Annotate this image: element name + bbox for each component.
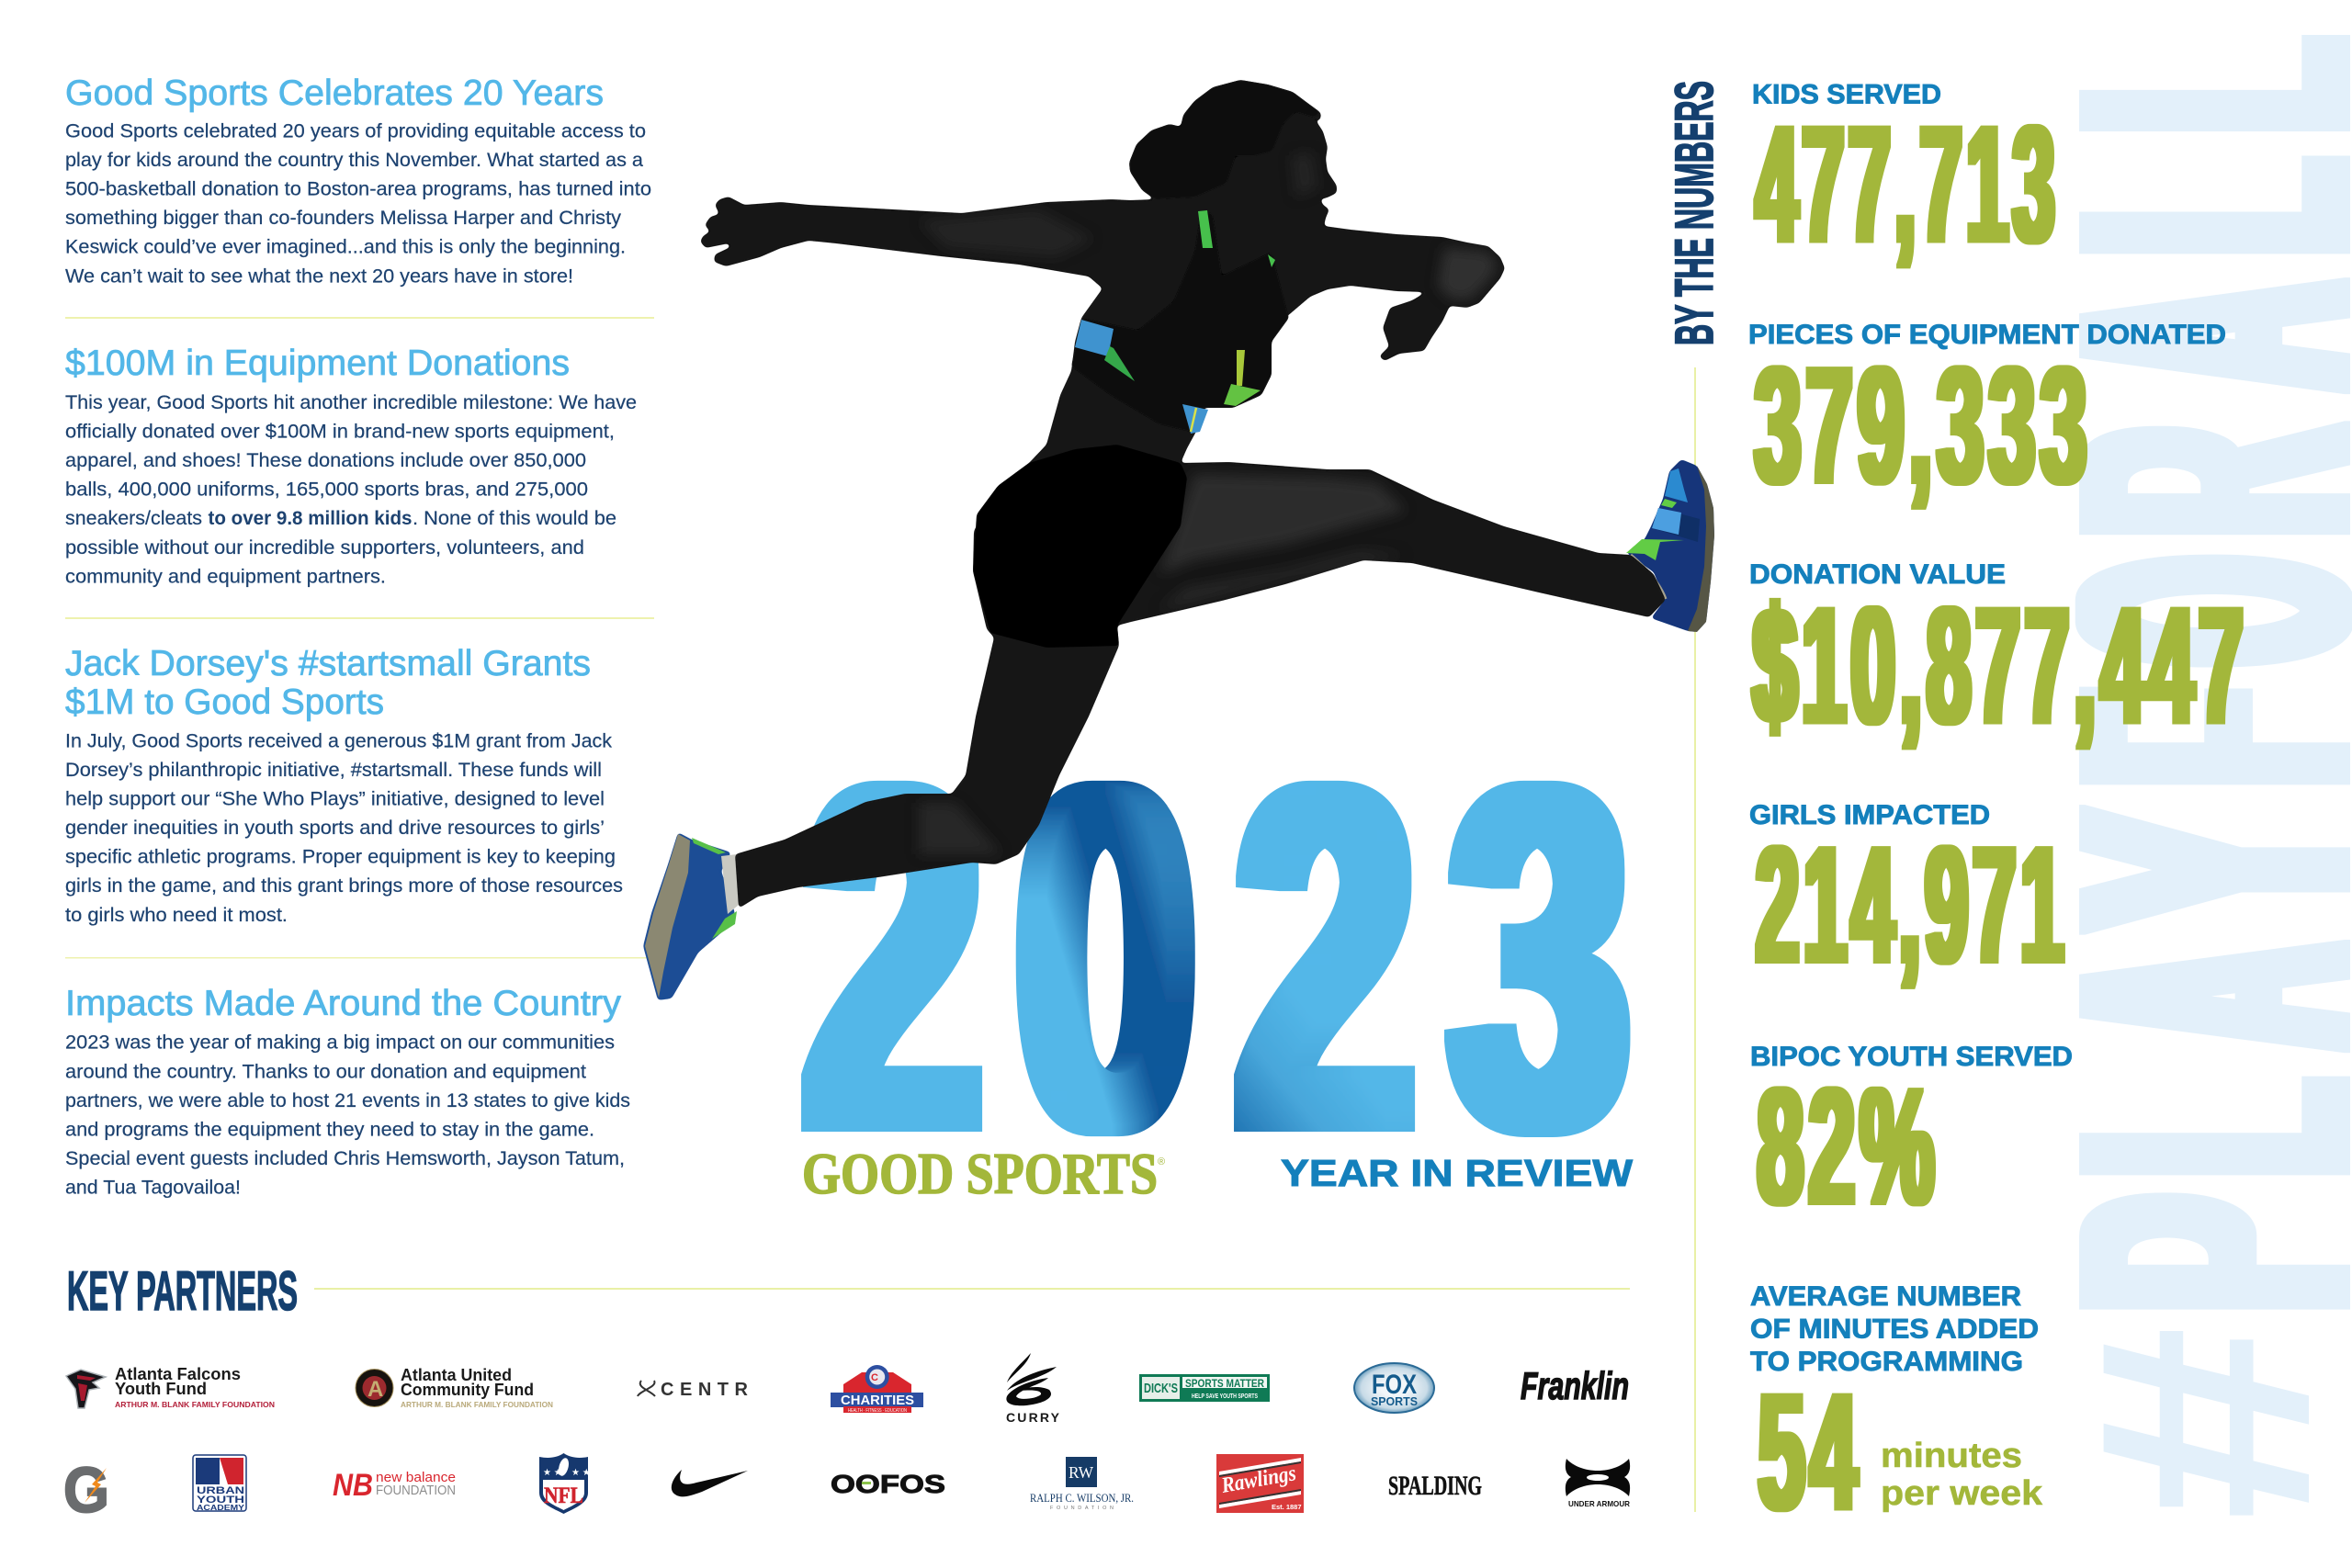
logo: New Balance Foundation: new balance [376, 1470, 456, 1485]
logo: Dick's Sports Matter: SPORTS MATTER [1185, 1377, 1264, 1390]
article: Jack Dorsey's #startsmall Grants [65, 644, 623, 926]
big year: 2023: 2 [804, 686, 981, 1230]
text block: play for kids around the country this November. What started as a [65, 150, 643, 171]
logo: Cubs Charities: C [871, 1372, 878, 1383]
logo: New Balance Foundation: NB [333, 1468, 373, 1503]
logo: Spalding: SPALDING [1388, 1471, 1482, 1501]
logo: New Balance Foundation: FOUNDATION [376, 1483, 456, 1498]
stat: average minutes added: TO PROGRAMMING [1750, 1347, 2023, 1377]
logo: Dick's Sports Matter: DICK'S [1144, 1381, 1178, 1396]
big year: 2023: 3 [1451, 686, 1628, 1230]
logo: New Balance Foundation [333, 1468, 456, 1503]
panel: statistics [1748, 79, 2247, 1545]
logo: Rawlings: Est. 1887 [1272, 1503, 1302, 1511]
logo: Atlanta Falcons Youth Fund: Youth Fund [115, 1380, 207, 1398]
logo: Cubs Charities [831, 1365, 923, 1414]
logo: Fox Sports [1354, 1363, 1434, 1413]
text block: This year, Good Sports hit another incredible milestone: We have [65, 392, 637, 413]
text block: specific athletic programs. Proper equipment is key to keeping [65, 847, 616, 868]
text block: help support our “She Who Plays” initiative, designed to level [65, 788, 605, 810]
logo: Dick's Sports Matter: HELP SAVE YOUTH SPORTS [1192, 1393, 1258, 1400]
text block [65, 392, 637, 587]
panel: key partners [63, 1260, 1630, 1526]
panel: news articles [65, 73, 654, 1198]
text block: Special event guests included Chris Hemsworth, Jayson Tatum, [65, 1148, 625, 1169]
sports bra [1071, 211, 1289, 433]
logo: Ralph C. Wilson Jr. Foundation: RW [1069, 1463, 1093, 1482]
heading [65, 644, 591, 722]
stat: average minutes added: AVERAGE NUMBER [1750, 1281, 2021, 1312]
logo: Under Armour: UNDER ARMOUR [1568, 1499, 1630, 1508]
logo: Centr: CENTR [661, 1380, 749, 1400]
stat: average minutes added: per week [1881, 1474, 2043, 1513]
text block: 500-basketball donation to Boston-area programs, has turned into [65, 179, 651, 200]
body [700, 80, 1666, 908]
text block: and Tua Tagovailoa! [65, 1178, 241, 1198]
left shoe [643, 832, 739, 1000]
logo: Atlanta United Community Fund: Atlanta United [401, 1366, 512, 1384]
stat: average minutes added: minutes [1881, 1437, 2022, 1475]
text block: something bigger than co-founders Melissa Harper and Christy [65, 208, 622, 229]
article: Good Sports Celebrates 20 Years [65, 73, 651, 287]
logo: NFL [539, 1453, 591, 1514]
heading: Good Sports Celebrates 20 Years [65, 73, 604, 113]
text block: Good Sports celebrated 20 years of providing equitable access to [65, 121, 646, 141]
logo: Dick's Sports Matter [1139, 1374, 1270, 1402]
logo: Curry [1006, 1353, 1060, 1425]
text block: 2023 was the year of making a big impact on our communities [65, 1032, 615, 1054]
article: $100M in Equipment Donations [65, 344, 637, 587]
text block: balls, 400,000 uniforms, 165,000 sports bras, and 275,000 [65, 479, 588, 501]
text block: possible without our incredible supporters, volunteers, and [65, 537, 584, 558]
text block: girls in the game, and this grant brings more of those resources [65, 875, 623, 897]
text block: Dorsey’s philanthropic initiative, #startsmall. These funds will [65, 760, 602, 781]
logo: NFL: ★ ★ [571, 1468, 591, 1478]
text block: . None of this would be [413, 508, 616, 529]
logo: MLB Urban Youth Academy: YOUTH [197, 1495, 244, 1506]
logo: MLB Urban Youth Academy: ACADEMY [197, 1504, 245, 1512]
heading: $1M to Good Sports [65, 682, 384, 722]
logo: Under Armour [1566, 1459, 1630, 1508]
text block: community and equipment partners. [65, 566, 386, 587]
logo: MLB Urban Youth Academy: URBAN [197, 1485, 244, 1496]
logo: Gatorade: G [63, 1454, 109, 1526]
logo: Fox Sports: SPORTS [1371, 1394, 1418, 1408]
text block: We can’t wait to see what the next 20 years have in store! [65, 265, 573, 287]
text block [65, 1032, 630, 1198]
bra accents [1075, 210, 1275, 434]
logo: Franklin: Franklin [1521, 1364, 1629, 1407]
logo: Oofos: OOFOS [831, 1470, 945, 1498]
stat: kids served [1752, 79, 2059, 277]
stat: kids served: KIDS SERVED [1752, 79, 1941, 110]
logo: Fox Sports: FOX [1372, 1370, 1417, 1400]
stat: pieces of equipment donated: PIECES OF EQUIPMENT DONATED [1748, 320, 2226, 350]
heading: $100M in Equipment Donations [65, 344, 570, 383]
big year: 2023: 0 [1017, 686, 1194, 1230]
big year: 2023 [804, 686, 1628, 1230]
logo: Atlanta United Community Fund: A [368, 1377, 383, 1402]
stat: donation value: DONATION VALUE [1749, 559, 2006, 590]
stat: BIPOC youth served: BIPOC YOUTH SERVED [1750, 1042, 2073, 1072]
stat: girls impacted: GIRLS IMPACTED [1749, 800, 1990, 830]
logo wordmark: Good Sports: GOOD SPORTS [802, 1142, 1158, 1206]
logo: Atlanta United Community Fund: Community Fund [401, 1381, 534, 1399]
heading: Jack Dorsey's #startsmall Grants [65, 644, 591, 683]
heading: Impacts Made Around the Country [65, 984, 622, 1023]
logo: Curry: CURRY [1006, 1410, 1060, 1425]
logo: Atlanta United Community Fund [356, 1366, 553, 1409]
logo: Atlanta Falcons Youth Fund: Atlanta Falcons [115, 1365, 241, 1383]
stat: BIPOC youth served: 82% [1757, 1055, 1939, 1239]
text block: to girls who need it most. [65, 905, 288, 926]
logo: Atlanta Falcons Youth Fund: ARTHUR M. BLANK FAMILY FOUNDATION [115, 1400, 275, 1409]
logo: NFL: ★ ★ [543, 1468, 562, 1478]
big year: 2023: 2 [1237, 686, 1414, 1230]
hair [1129, 80, 1321, 199]
heading: key partners: KEY PARTNERS [67, 1260, 298, 1322]
text block [65, 730, 623, 926]
logo: Ralph C. Wilson Jr. Foundation [1030, 1457, 1134, 1511]
text block: officially donated over $100M in brand-new sports equipment, [65, 422, 615, 443]
logo: Ralph C. Wilson Jr. Foundation: FOUNDATION [1050, 1506, 1114, 1511]
stat: average minutes added: OF MINUTES ADDED [1750, 1314, 2039, 1345]
logo: Nike swoosh [672, 1470, 748, 1496]
text block: and programs the equipment they need to stay in the game. [65, 1119, 594, 1140]
background hashtag: #PLAYFORALL [1999, 40, 2352, 1520]
logo: Atlanta Falcons Youth Fund [66, 1365, 275, 1409]
stat: girls impacted [1749, 800, 2068, 998]
logo: MLB Urban Youth Academy [193, 1455, 246, 1512]
logo: Rawlings [1216, 1454, 1304, 1513]
logo: Cubs Charities: CHARITIES [841, 1393, 914, 1408]
text block: In July, Good Sports received a generous $1M grant from Jack [65, 730, 612, 751]
text block: gender inequities in youth sports and drive resources to girls’ [65, 818, 605, 839]
stat: average minutes added: 54 [1758, 1359, 1861, 1545]
logo: Rawlings: Rawlings [1219, 1461, 1298, 1498]
text block: to over 9.8 million kids [208, 508, 412, 529]
skin highlights [919, 152, 1498, 854]
logo wordmark: Good Sports: ® [1158, 1156, 1165, 1168]
text block: sneakers/cleats [65, 508, 202, 529]
text block: Keswick could’ve ever imagined...and this is only the beginning. [65, 237, 626, 258]
logo: Atlanta United Community Fund: ARTHUR M. BLANK FAMILY FOUNDATION [401, 1400, 553, 1409]
article: Impacts Made Around the Country [65, 984, 630, 1198]
text block: apparel, and shoes! These donations include over 850,000 [65, 450, 586, 471]
subtitle: Year in Review: YEAR IN REVIEW [1281, 1152, 1633, 1194]
logo: Cubs Charities: HEALTH · FITNESS · EDUCATION [848, 1408, 907, 1414]
right shoe [1626, 459, 1714, 632]
logo: NFL: NFL [544, 1483, 583, 1508]
logo: Ralph C. Wilson Jr. Foundation: RALPH C. WILSON, JR. [1030, 1491, 1134, 1505]
runner silhouette [643, 80, 1714, 1000]
divider: by the numbers vertical rule [1694, 367, 1696, 1512]
text block: around the country. Thanks to our donation and equipment [65, 1061, 586, 1082]
stat: average minutes added [1750, 1281, 2043, 1545]
shorts [973, 445, 1187, 648]
text block [65, 121, 651, 287]
text block: partners, we were able to host 21 events in 13 states to give kids [65, 1090, 630, 1111]
